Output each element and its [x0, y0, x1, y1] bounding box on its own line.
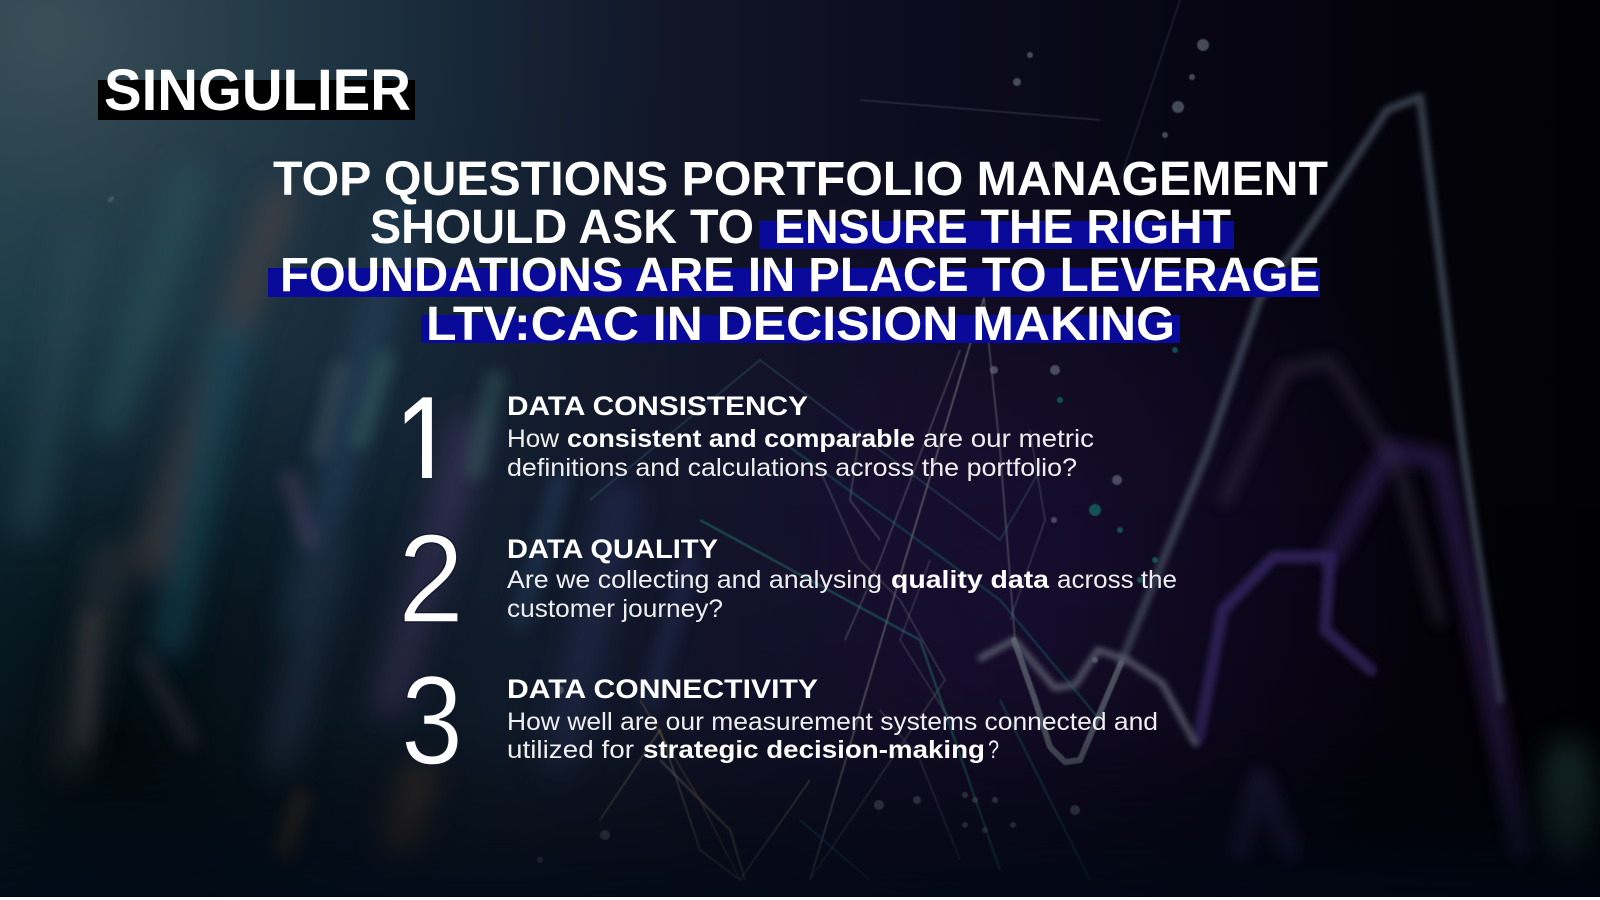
body text: Are we collecting and analysing — [507, 566, 882, 594]
title with blue highlights: LTV:CAC IN DECISION MAKING — [426, 298, 1175, 351]
heading: DATA QUALITY — [507, 534, 718, 564]
body text: across the — [1057, 566, 1177, 594]
heading: DATA CONSISTENCY — [507, 391, 808, 421]
title with blue highlights: ENSURE THE RIGHT — [774, 201, 1231, 254]
title with blue highlights: SHOULD ASK TO — [370, 201, 754, 254]
title with blue highlights: FOUNDATIONS ARE IN PLACE TO LEVERAGE — [280, 249, 1320, 302]
body text: definitions and calculations across the portfolio? — [507, 454, 1077, 482]
body text: are our metric — [923, 425, 1094, 453]
title with blue highlights: TOP QUESTIONS PORTFOLIO MANAGEMENT — [273, 153, 1328, 206]
body text: customer journey? — [507, 595, 723, 623]
body text: quality data — [891, 566, 1050, 594]
body text: How — [507, 425, 560, 453]
number 1: 1 — [394, 368, 456, 520]
icon: large rising chart lines — [981, 97, 1594, 862]
body text: ? — [988, 736, 999, 764]
item 2: data quality — [398, 508, 1177, 649]
body text — [507, 425, 1094, 482]
body text: strategic decision-making — [643, 736, 985, 764]
title with blue highlights — [268, 153, 1328, 351]
item 1: data consistency — [404, 396, 1094, 481]
number 3: 3 — [401, 650, 463, 791]
body text — [507, 708, 1158, 764]
heading: DATA CONNECTIVITY — [507, 674, 818, 704]
body text — [507, 566, 1177, 623]
body text: utilized for — [507, 736, 634, 764]
number 2: 2 — [398, 508, 464, 649]
body text: How well are our measurement systems connected and — [507, 708, 1158, 736]
logo: SINGULIER on black box: SINGULIER — [104, 58, 411, 123]
item 3: data connectivity — [401, 650, 1158, 791]
body text: consistent and comparable — [567, 425, 915, 453]
icon: thin network lines and dots — [590, 0, 1180, 880]
